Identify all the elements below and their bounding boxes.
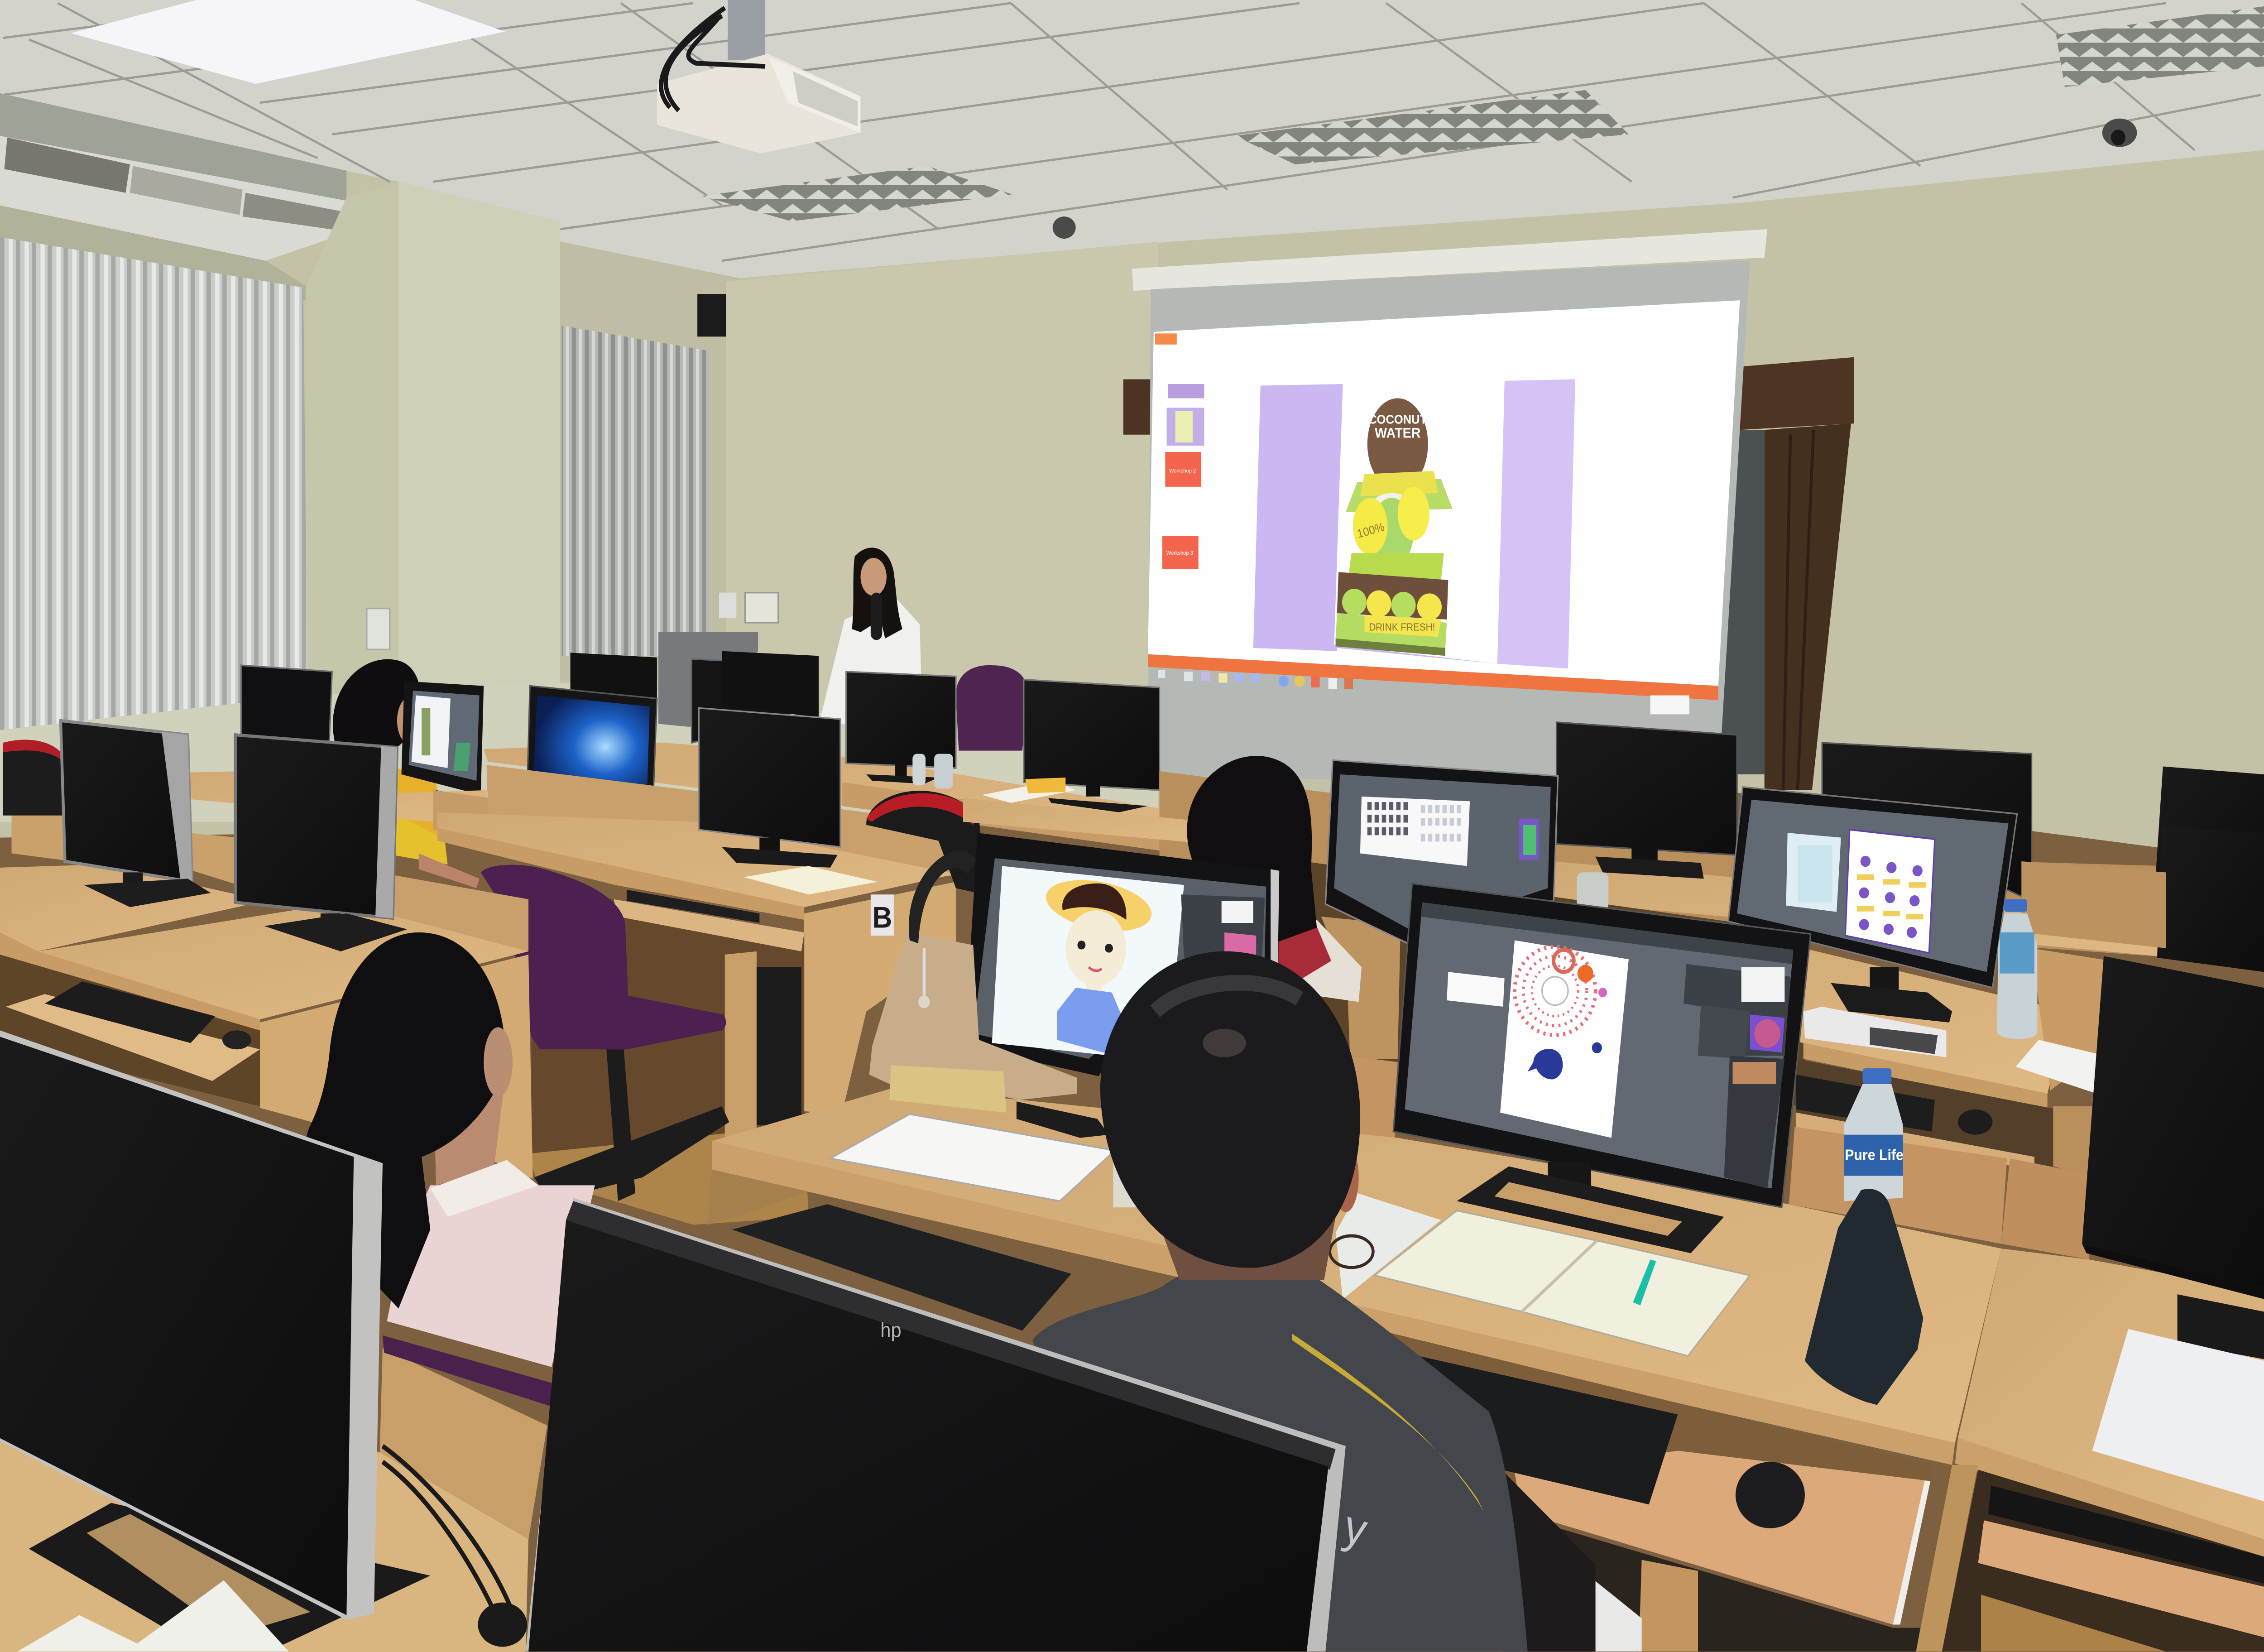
face (1065, 910, 1126, 986)
base of lower room: dark wood and floor (0, 790, 2264, 1652)
file tab (1155, 333, 1177, 345)
window blinds: centre (561, 326, 709, 656)
lower back wall light (0, 683, 1158, 822)
poster: coconut water (1334, 381, 1505, 664)
orange status bar (1148, 654, 1718, 700)
paper stack (830, 1114, 1115, 1201)
PC under desk (757, 967, 801, 1125)
monitor with Windows desktop (520, 686, 657, 838)
speaker (697, 294, 748, 336)
jacket (1032, 1261, 1528, 1652)
ceiling projector (657, 0, 861, 154)
thumbnail panel: Workshop 3 (1166, 550, 1193, 556)
trousers (1501, 1470, 1596, 1652)
notebook (1375, 1210, 1750, 1356)
foreground monitor left (0, 1030, 430, 1652)
mid right desk (1530, 861, 2166, 1177)
window blinds: left (0, 237, 307, 730)
white rectangle (1447, 972, 1505, 1007)
neck (1162, 1217, 1336, 1280)
poster: coconut water: COCONUT (1368, 412, 1427, 427)
end panel (801, 882, 956, 1114)
handbag (869, 850, 1077, 1100)
monitor back 1 (241, 665, 332, 743)
side small panel (725, 951, 757, 1139)
bottle (1577, 872, 1608, 910)
front edge (437, 828, 804, 920)
panels between mid and main desks (1346, 1056, 2089, 1259)
purple side panel right (1497, 379, 1575, 668)
dotted circles (1515, 946, 1596, 1035)
monitor with chart (401, 681, 494, 809)
monitor stand (1457, 1162, 1724, 1253)
mouse (222, 1030, 251, 1049)
keyboard right (1391, 1349, 1678, 1504)
whale large (1528, 1049, 1563, 1080)
pillar (306, 182, 560, 743)
under tray wood and dark (1522, 1517, 1920, 1652)
pouch (889, 1065, 1007, 1113)
black backpack (1805, 1189, 1923, 1405)
back left monitors row (241, 632, 819, 743)
bottle pure life (1844, 1068, 1904, 1201)
ceiling vent light: centre right (1234, 90, 1629, 164)
foreground left desk (0, 1441, 528, 1652)
woman in yellow at back (332, 659, 480, 888)
side wood (2053, 1106, 2094, 1177)
water bottle right (1997, 899, 2037, 1039)
projection screen (1132, 229, 1767, 790)
wooden door frame right of screen (1123, 357, 1854, 790)
under desk shadow (531, 885, 804, 1154)
wall section behind blinds (560, 242, 739, 680)
back panel (387, 874, 528, 951)
screen (0, 1030, 383, 1620)
left front desk (0, 864, 533, 1179)
purple side panel left (1253, 384, 1343, 651)
dark shadow under desk (1375, 1329, 1932, 1513)
poster: coconut water: DRINK FRESH! (1369, 621, 1435, 633)
woman in foreground left (306, 932, 595, 1407)
taskbar icons (1158, 670, 1353, 689)
pen (1633, 1259, 1656, 1306)
cables (661, 8, 765, 110)
tray (614, 899, 804, 951)
monitor back right 2 (1822, 743, 2032, 901)
middle desk: B (872, 901, 892, 934)
artboard (1500, 940, 1629, 1138)
ear (1333, 1143, 1359, 1212)
monitor: whale artwork (1393, 884, 1811, 1207)
wall strip above blinds (0, 206, 306, 300)
monitor back 2 (571, 653, 657, 703)
pink top (387, 1185, 595, 1367)
mouse (1958, 1109, 1993, 1135)
colour dots (1578, 965, 1593, 982)
mouse back right (2087, 904, 2135, 923)
under desk dark (1942, 1470, 2264, 1652)
keyboard tray (6, 994, 260, 1081)
paper on desk (743, 866, 878, 894)
monitor: people illustration (1325, 760, 1558, 948)
tray (1796, 1113, 2034, 1169)
hair (1062, 884, 1127, 920)
front edge (1804, 1043, 2048, 1109)
back row monitor right (1024, 680, 1160, 812)
middle desk (437, 765, 957, 1225)
backmost desk (484, 743, 1191, 855)
monitor: cartoon character (964, 833, 1279, 1076)
black and red chair (866, 791, 985, 894)
foreground monitor centre (526, 1198, 1346, 1652)
thumbnail panel: Workshop 2 (1169, 468, 1196, 474)
under desk (1796, 1059, 2058, 1169)
floor wood (528, 1125, 809, 1225)
ceiling light: left (71, 0, 505, 84)
back panel (487, 765, 957, 877)
back desk right of centre (963, 798, 1805, 1106)
ceiling vent light: top right (2056, 6, 2264, 87)
back woman in centre (1187, 756, 1362, 1002)
partition behind woman (380, 1348, 547, 1539)
foreground monitor centre: hp (880, 1319, 902, 1342)
monitor back right 3 (2154, 767, 2264, 896)
presenter (820, 547, 921, 735)
right back desk top (1552, 861, 2166, 956)
monitor back centre (699, 708, 840, 868)
water bottle behind head (1113, 1144, 1148, 1207)
cables (383, 1446, 513, 1620)
ceiling vent light: centre (702, 166, 1012, 221)
panels (1684, 964, 1790, 1056)
screen surface (1148, 261, 1750, 790)
paper with booklet (1804, 1007, 1946, 1057)
mid-row monitor with infographics (1728, 787, 2017, 1023)
hair (1100, 951, 1360, 1268)
projector body (657, 54, 861, 154)
papers right (2092, 1329, 2264, 1501)
back row monitor centre (846, 672, 956, 784)
security camera: centre (1053, 216, 1076, 239)
main keyboard tray (1375, 1329, 1932, 1652)
stand (29, 1503, 430, 1650)
water bottles on back desk (912, 754, 953, 788)
near surface (38, 903, 528, 1019)
purple chair (481, 865, 729, 1201)
main keyboard (732, 1204, 1071, 1330)
end panel (260, 955, 533, 1179)
right panels (2032, 948, 2111, 1090)
under desk (0, 955, 260, 1106)
right tray (1978, 1520, 2264, 1637)
chair back (383, 1335, 552, 1407)
monitor back 4 (722, 651, 819, 717)
monitor back right 1 (1557, 722, 1737, 879)
security camera: right (2102, 119, 2137, 147)
monitor far left (61, 720, 211, 907)
top (1530, 932, 2067, 1094)
top surface (437, 812, 956, 907)
monitor stand (2178, 1294, 2264, 1359)
clock white box (1650, 696, 1689, 714)
hair (306, 932, 505, 1309)
purple chair at back (956, 665, 1028, 751)
projected slide (1148, 300, 1740, 686)
keyboard (45, 981, 215, 1043)
PC tower (658, 632, 758, 727)
chair at far left (3, 740, 67, 816)
mouse (1736, 1462, 1805, 1528)
glasses and papers (1330, 1193, 1441, 1299)
monitor left (235, 735, 407, 951)
mounting arm (728, 0, 765, 60)
monitor far right mid (2157, 826, 2264, 972)
centre wall (726, 242, 1158, 774)
man in foreground (1032, 951, 1596, 1652)
man in foreground: y (1339, 1500, 1372, 1557)
wall switch panels (367, 593, 778, 649)
monitor back 3 (691, 659, 790, 743)
sticky notes and paper (982, 778, 1076, 803)
air conditioner (0, 93, 358, 261)
neck (433, 1075, 505, 1185)
keyboard (1796, 1075, 1935, 1132)
tray surface (1515, 1451, 1929, 1625)
ceiling (0, 0, 2264, 278)
far surface (0, 864, 266, 951)
screen housing (1132, 229, 1767, 291)
right back wood panel (1160, 771, 2264, 964)
thumbnail panel (1162, 384, 1204, 569)
right big monitor (2082, 956, 2264, 1288)
right keyboard (1988, 1485, 2264, 1584)
bottle pure life: Pure Life (1845, 1146, 1904, 1163)
whale small (1592, 1042, 1602, 1053)
main desk front (712, 1141, 1955, 1465)
front edge (38, 951, 260, 1030)
shirt (1057, 988, 1123, 1056)
main desk top (707, 1087, 2001, 1465)
right main desk (1916, 1244, 2264, 1652)
keyboard (627, 890, 759, 923)
monitor foot (1017, 1101, 1109, 1138)
far left desk and panels (12, 771, 491, 885)
poster: coconut water: 100% (1356, 520, 1386, 541)
panel behind (2021, 861, 2166, 948)
hat (1042, 872, 1155, 939)
papers (17, 1580, 289, 1652)
side panels (1181, 894, 1265, 958)
label B (871, 894, 894, 936)
paper (2016, 1040, 2105, 1094)
poster: coconut water: WATER (1375, 426, 1421, 441)
